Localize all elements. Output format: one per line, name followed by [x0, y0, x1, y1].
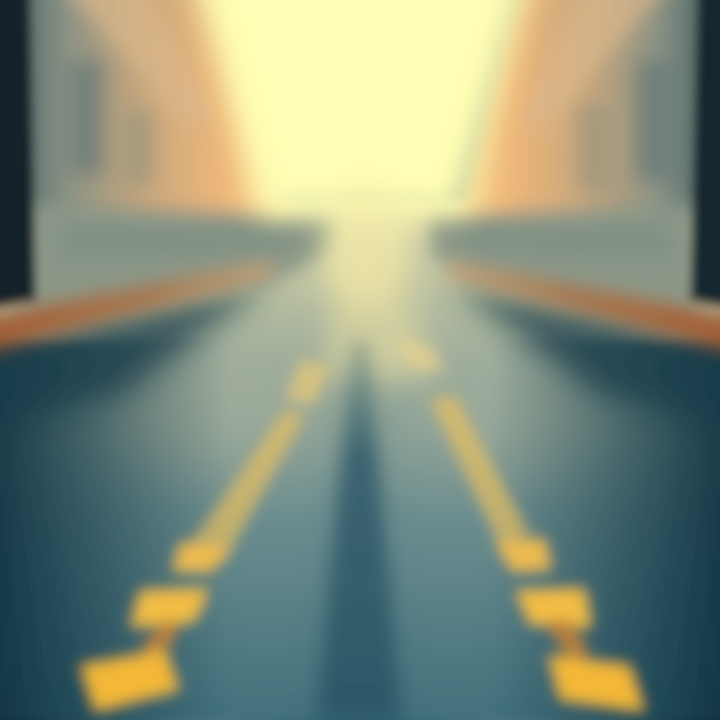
right building [430, 0, 710, 320]
right orange curb [445, 262, 720, 358]
bright sky glow [190, 0, 535, 305]
left building [10, 0, 335, 320]
dark far-right edge [690, 0, 720, 315]
center road glow [325, 230, 435, 380]
left orange curb [0, 262, 275, 358]
dark far-left edge [0, 0, 36, 315]
center dark road stripe [316, 340, 402, 720]
left yellow lane line [80, 360, 330, 712]
road surface [0, 200, 720, 720]
right yellow lane line [395, 340, 645, 712]
